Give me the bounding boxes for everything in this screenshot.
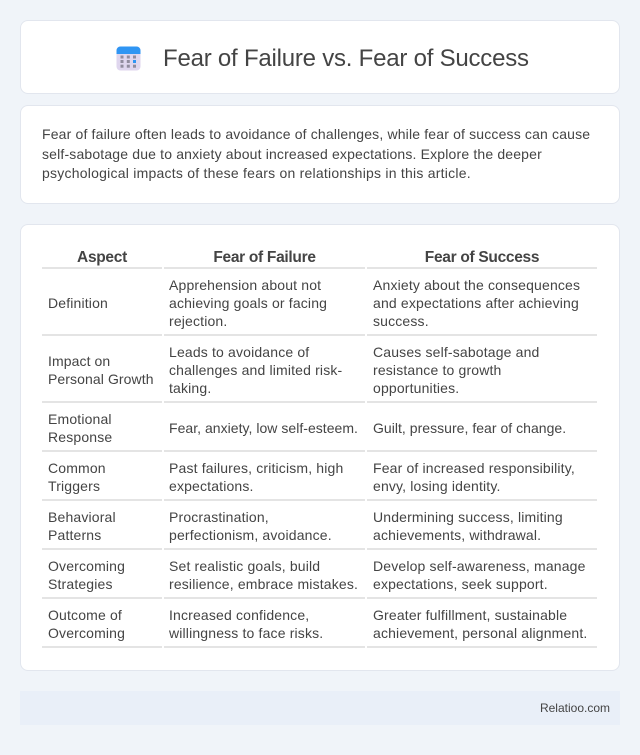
cell: Overcoming, success: Develop self-awareness, manage <box>373 558 586 574</box>
row: Common Triggers: Common <box>48 460 106 476</box>
text: introduction: psychological impacts of these fears on relationships in this article. <box>42 165 471 181</box>
cell: Triggers, failure: expectations. <box>169 478 254 494</box>
cell: Definition, failure: rejection. <box>169 313 227 329</box>
cell: Outcome, failure: willingness to face risks. <box>169 625 323 641</box>
cell: Behavioral, success: achievements, withdrawal. <box>373 527 541 543</box>
cell: Emotional, failure: Fear, anxiety, low self-esteem. <box>169 420 358 436</box>
text: introduction: Fear of failure often leads to avoidance of challenges, while fear of success can cause <box>42 126 590 142</box>
row: Common Triggers <box>48 460 106 494</box>
cell: Impact, success <box>373 344 540 396</box>
row: Emotional Response <box>48 411 112 445</box>
cell: Impact, success: resistance to growth <box>373 362 501 378</box>
title: Fear of Failure vs. Fear of Success <box>163 45 529 72</box>
icon: calendar <box>116 46 140 70</box>
cell: Emotional, success: Guilt, pressure, fear of change. <box>373 420 566 436</box>
cell: Behavioral, failure <box>169 509 332 543</box>
cell: Definition, failure: achieving goals or facing <box>169 295 327 311</box>
row: Emotional Response: Emotional <box>48 411 112 427</box>
cell: Outcome, success: achievement, personal alignment. <box>373 625 587 641</box>
cell: Triggers, success: envy, losing identity. <box>373 478 501 494</box>
cell: Triggers, success: Fear of increased responsibility, <box>373 460 575 476</box>
footer text: Relatioo.com <box>540 701 610 715</box>
heading: Fear of Success: Fear of Success <box>425 249 539 266</box>
heading: Aspect: Aspect <box>77 249 127 266</box>
cell: Impact, success: opportunities. <box>373 380 459 396</box>
cell: Definition, success: and expectations after achieving <box>373 295 579 311</box>
row: Overcoming Strategies: Strategies <box>48 576 113 592</box>
cell: Impact, success: Causes self-sabotage and <box>373 344 540 360</box>
text: introduction <box>42 126 590 181</box>
row: Common Triggers: Triggers <box>48 478 100 494</box>
cell: Definition, failure: Apprehension about not <box>169 277 321 293</box>
cell: Triggers, success <box>373 460 575 494</box>
cell: Impact, failure <box>169 344 342 396</box>
row: Behavioral Patterns <box>48 509 116 543</box>
row: Outcome of Overcoming: Overcoming <box>48 625 125 641</box>
cell: Behavioral, failure: perfectionism, avoidance. <box>169 527 332 543</box>
panel: comparison table <box>20 224 620 671</box>
cell: Outcome, success <box>373 607 587 641</box>
cell: Overcoming, success: expectations, seek support. <box>373 576 548 592</box>
cell: Behavioral, success: Undermining success, limiting <box>373 509 563 525</box>
row: Definition: Definition <box>48 295 108 311</box>
cell: Definition, failure <box>169 277 327 329</box>
text: introduction: self-sabotage due to anxiety about increased expectations. Explore the deeper <box>42 146 542 162</box>
cell: Impact, failure: challenges and limited risk- <box>169 362 342 378</box>
row: Outcome of Overcoming <box>48 607 125 641</box>
cell: Definition, success <box>373 277 580 329</box>
cell: Behavioral, failure: Procrastination, <box>169 509 269 525</box>
row: Behavioral Patterns: Patterns <box>48 527 101 543</box>
cell: Behavioral, success <box>373 509 563 543</box>
row: Emotional Response: Response <box>48 429 112 445</box>
row: Impact on Personal Growth: Impact on <box>48 353 110 369</box>
cell: Impact, failure: taking. <box>169 380 211 396</box>
cell: Outcome, failure: Increased confidence, <box>169 607 309 623</box>
cell: Overcoming, success <box>373 558 586 592</box>
row: Outcome of Overcoming: Outcome of <box>48 607 122 623</box>
cell: Outcome, success: Greater fulfillment, sustainable <box>373 607 567 623</box>
cell: Definition, success: Anxiety about the consequences <box>373 277 580 293</box>
cell: Impact, failure: Leads to avoidance of <box>169 344 309 360</box>
cell: Outcome, failure <box>169 607 323 641</box>
cell: Overcoming, failure <box>169 558 358 592</box>
cell: Triggers, failure: Past failures, criticism, high <box>169 460 343 476</box>
heading: Fear of Failure: Fear of Failure <box>213 249 316 266</box>
panel: title card <box>20 20 620 94</box>
row: Impact on Personal Growth: Personal Growth <box>48 371 154 387</box>
row: Overcoming Strategies: Overcoming <box>48 558 125 574</box>
row: Impact on Personal Growth <box>48 353 154 387</box>
row: Overcoming Strategies <box>48 558 125 592</box>
cell: Overcoming, failure: resilience, embrace mistakes. <box>169 576 358 592</box>
footer <box>20 691 620 725</box>
cell: Overcoming, failure: Set realistic goals, build <box>169 558 320 574</box>
cell: Definition, success: success. <box>373 313 429 329</box>
row: Behavioral Patterns: Behavioral <box>48 509 116 525</box>
cell: Triggers, failure <box>169 460 343 494</box>
panel: introduction <box>20 105 620 204</box>
